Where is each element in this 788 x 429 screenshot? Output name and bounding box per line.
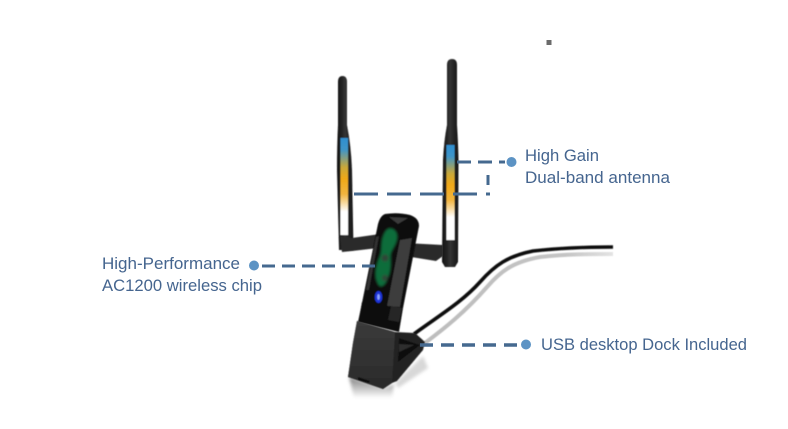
green circuit area xyxy=(375,228,398,287)
callout text: wireless chip xyxy=(102,255,262,295)
USB dock xyxy=(348,321,425,389)
left antenna xyxy=(337,76,354,250)
small grey square xyxy=(546,40,552,45)
USB adapter body xyxy=(358,213,419,332)
callout dot: antenna xyxy=(506,157,516,167)
callout text: dock: USB desktop Dock Included xyxy=(541,336,747,354)
callout text: antenna: High Gain xyxy=(525,147,599,165)
blue LED xyxy=(375,291,382,303)
callout text: antenna: Dual-band antenna xyxy=(525,169,671,187)
dock side shadow xyxy=(395,356,428,388)
callout dot: dock xyxy=(521,340,531,350)
dock reflection xyxy=(349,377,394,398)
callout text: antenna xyxy=(525,147,671,187)
collar band xyxy=(360,302,402,322)
callout dot: wireless chip xyxy=(249,260,259,270)
callout line: wireless chip xyxy=(262,264,375,268)
callout line: antenna bracket xyxy=(354,162,505,194)
antenna arms xyxy=(340,234,443,261)
callout line: dock xyxy=(420,343,518,347)
top facet xyxy=(389,217,408,224)
cable with shadow xyxy=(414,247,613,343)
callout text: wireless chip: AC1200 wireless chip xyxy=(102,277,262,295)
right antenna xyxy=(442,59,458,267)
left edge strip xyxy=(366,236,379,290)
right grey strip xyxy=(387,238,412,307)
callout text: wireless chip: High-Performance xyxy=(102,255,240,273)
